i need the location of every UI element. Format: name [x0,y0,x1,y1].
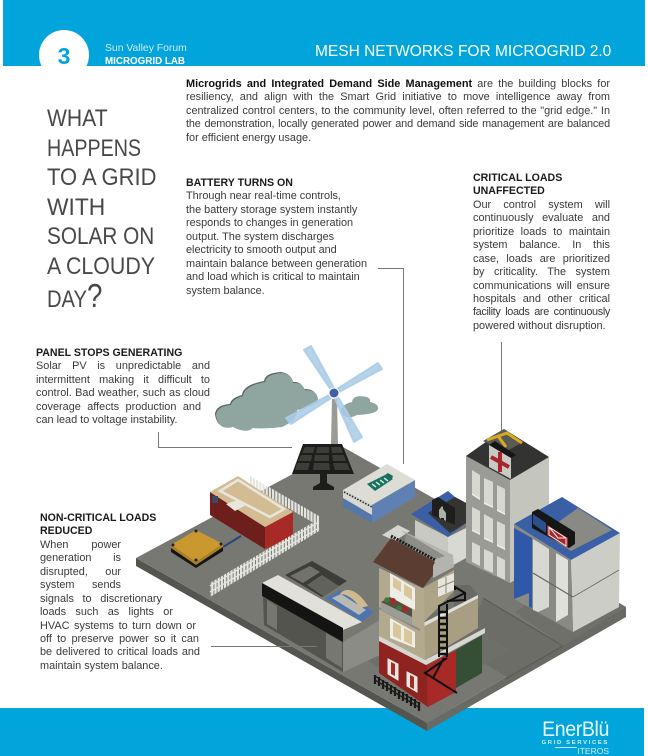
text: non-critical loads reduced: off to preserve power so it can [40,633,199,645]
generator box [171,530,241,568]
townhouse [373,525,485,711]
text: panel stops generating: PANEL STOPS GENERATING [36,347,182,359]
main question heading: WHAT [47,105,108,132]
text: non-critical loads reduced: loads such as lights or [40,606,173,618]
text: critical loads unaffected: prioritize loads to maintain [473,226,610,238]
main question heading: WITH [47,194,105,221]
callout line: panel [158,432,292,448]
text: critical loads unaffected: UNAFFECTED [473,185,545,197]
text: battery turns on: output. The system discharges [186,231,334,243]
text: critical loads unaffected: CRITICAL LOADS [473,172,562,184]
text: battery turns on: BATTERY TURNS ON [186,177,293,189]
text: non-critical loads reduced: be delivered to critical loads and [40,646,200,658]
text: panel stops generating: can lead to voltage instability. [36,414,177,426]
cloud small [340,396,378,417]
text: critical loads unaffected: case, loads are prioritized [473,253,610,265]
text: battery turns on: and load which is critical to maintain [186,271,360,283]
intro paragraph: resiliency, and align with the Smart Grid initiative to move intelligence away from [186,91,610,103]
text: battery turns on: the battery storage system instantly [186,204,357,216]
logo divider line [555,746,577,748]
text: panel stops generating [36,347,210,426]
intro paragraph: the demonstration, locally generated power and demand side management are balanced [186,118,610,130]
text: non-critical loads reduced: HVAC systems to turn down or [40,620,196,632]
text: non-critical loads reduced: generation is [40,552,121,564]
event name [105,43,187,66]
wind turbine [286,346,382,444]
EnerBlu logo [542,718,609,756]
text: critical loads unaffected: facility loads are continuously [473,306,610,318]
text: critical loads unaffected: system balance. In this [473,239,610,251]
icon: red cross [491,452,509,472]
text: critical loads unaffected: by criticality. The system [473,266,610,278]
post office [514,497,620,632]
text: panel stops generating: Solar PV is unpredictable and [36,360,210,372]
intro paragraph: centralized control centers, to the community level, often referred to the "grid edge." In [186,105,610,117]
footer band [0,708,644,756]
main question heading: HAPPENS [47,135,141,162]
front fence [210,519,319,597]
intro paragraph [186,78,610,144]
text: panel stops generating: coverage affects production and [36,401,201,413]
main question heading: TO A GRID [47,164,156,191]
text: critical loads unaffected: communications will ensure [473,280,610,292]
callout line: critical loads [500,342,502,432]
text: non-critical loads reduced: system sends [40,579,121,591]
text: critical loads unaffected [473,172,610,332]
header band [3,0,645,66]
text: panel stops generating: intermittent making it difficult to [36,374,210,386]
text: non-critical loads reduced: disrupted, our [40,566,121,578]
cloud large [215,372,318,431]
intro paragraph: for efficient energy usage. [186,132,311,144]
text: non-critical loads reduced: REDUCED [40,525,92,537]
text: non-critical loads reduced: NON-CRITICAL LOADS [40,512,156,524]
text: battery turns on: responds to changes in generation [186,217,353,229]
fire escape [425,587,465,693]
text: non-critical loads reduced [40,512,200,672]
city platform [136,447,626,731]
event name: MICROGRID LAB [105,56,185,66]
text: battery turns on: system balance. [186,284,265,296]
main question heading: A CLOUDY [47,253,155,280]
text: non-critical loads reduced: signals to discretionary [40,593,162,605]
main question heading [47,105,156,314]
back fence [250,476,319,526]
hospital [466,429,549,583]
icon: school [439,506,446,521]
text: critical loads unaffected: Our control system will [473,199,610,211]
main question heading: SOLAR ON [47,223,154,250]
EnerBlu logo: GRID SERVICES [542,740,609,746]
house with red walls [210,476,293,549]
school building [411,491,466,568]
text: battery turns on: maintain balance between generation [186,258,367,270]
text: battery turns on: electricity to smooth output and [186,244,337,256]
storefront building [262,561,380,672]
solar panel [292,444,354,490]
page title: MESH NETWORKS FOR MICROGRID 2.0 [315,43,611,60]
event name: Sun Valley Forum [105,43,187,54]
callout line: battery [378,268,404,464]
text: panel stops generating: control. Bad weather, such as cloud [36,387,210,399]
text: critical loads unaffected: hospitals and other critical [473,293,610,305]
battery storage unit [343,464,415,523]
EnerBlu logo: EnerBlü [542,718,609,741]
text: critical loads unaffected: continuously evaluate and [473,212,610,224]
text: non-critical loads reduced: When power [40,539,121,551]
icon: battery [367,473,393,491]
text: battery turns on: Through near real-time controls, [186,190,341,202]
text: non-critical loads reduced: maintain system balance. [40,660,163,672]
EnerBlu logo: ITEROS [577,746,609,756]
iron railing [375,675,420,711]
text: critical loads unaffected: powered without disruption. [473,320,606,332]
main question heading: DAY? [47,277,102,314]
text: battery turns on [186,177,367,296]
callout line: non-critical [211,646,317,648]
intro paragraph: Microgrids and Integrated Demand Side Management are the building blocks for [186,78,610,90]
icon: envelope [549,527,566,546]
